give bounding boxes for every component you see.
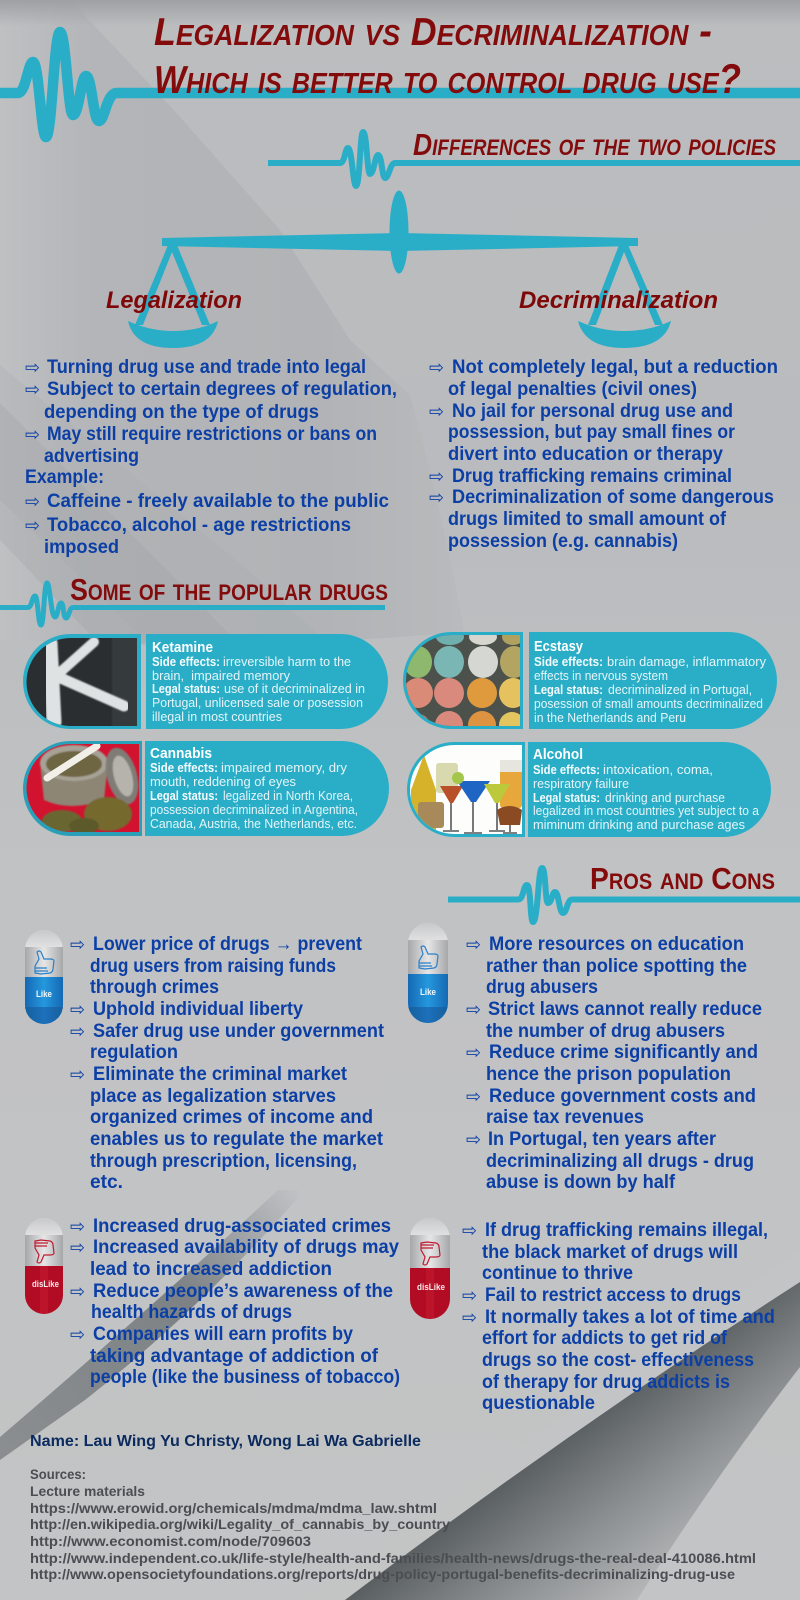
- text: ketamine card: Ketamine: [152, 640, 213, 656]
- text block: legalization cons: ⇨: [70, 1238, 85, 1258]
- text block: decriminalization pros: rather than police spotting the: [486, 956, 747, 977]
- text: alcohol card: legalized in most countries yet subject to a: [533, 804, 759, 818]
- text block: legalization cons: ⇨: [70, 1216, 85, 1238]
- text block: decriminalization pros: More resources on education: [489, 934, 744, 955]
- text block: decriminalization cons: Fail to restrict access to drugs: [485, 1285, 741, 1306]
- text block: decriminalization cons: ⇨: [462, 1220, 477, 1242]
- icon: dislike pill, decriminalization: [410, 1218, 450, 1319]
- text block: legalization points: Turning drug use and trade into legal: [47, 357, 366, 378]
- text block: legalization pros: [70, 934, 385, 1193]
- panel: ecstasy: [403, 632, 777, 729]
- text block: decriminalization points: ⇨: [429, 402, 444, 422]
- image: ecstasy pills: [403, 632, 523, 729]
- text block: decriminalization pros: ⇨: [466, 1086, 481, 1108]
- text block: legalization points: ⇨: [25, 516, 40, 536]
- text block: decriminalization pros: raise tax revenues: [486, 1107, 644, 1128]
- title: [154, 7, 741, 102]
- text block: decriminalization pros: In Portugal, ten years after: [488, 1129, 717, 1150]
- text block: legalization pros: through prescription, licensing,: [90, 1151, 357, 1172]
- text block: legalization points: Caffeine - freely available to the public: [47, 491, 389, 512]
- text block: decriminalization points: Not completely legal, but a reduction: [452, 357, 778, 378]
- image: ketamine powder: [20, 634, 141, 729]
- text: cannabis card: [145, 741, 389, 836]
- text: ketamine card: Side effects:: [152, 655, 220, 669]
- text block: legalization pros: Lower price of drugs → prevent: [93, 934, 363, 955]
- text block: decriminalization cons: ⇨: [462, 1286, 477, 1306]
- text block: decriminalization points: possession, but pay small fines or: [448, 422, 736, 443]
- text block: decriminalization points: ⇨: [429, 358, 444, 378]
- text block: legalization pros: through crimes: [90, 977, 219, 998]
- icon: dislike pill, decriminalization: disLike: [417, 1282, 445, 1293]
- text: alcohol card: respiratory failure: [533, 777, 629, 791]
- label: legalization: Legalization: [106, 287, 242, 314]
- text: ecstasy card: posession of small amounts decriminalized: [534, 697, 763, 711]
- text block: legalization pros: organized crimes of income and: [90, 1107, 373, 1128]
- sources: Lecture materials: [30, 1484, 145, 1499]
- text: ecstasy card: [529, 632, 777, 729]
- panel: ketamine: [20, 634, 388, 729]
- text: ketamine card: use of it decriminalized in: [224, 682, 365, 696]
- icon: like pill, decriminalization: Like: [420, 987, 436, 998]
- text block: legalization pros: Uphold individual liberty: [93, 999, 303, 1020]
- text: cannabis card: impaired memory, dry: [221, 761, 348, 775]
- text: ecstasy card: decriminalized in Portugal,: [608, 683, 752, 697]
- text: ecstasy card: brain damage, inflammatory: [607, 655, 767, 669]
- text block: decriminalization pros: ⇨: [466, 1130, 481, 1150]
- text: ecstasy card: Side effects:: [534, 655, 603, 669]
- text block: legalization points: imposed: [44, 537, 119, 558]
- heading: pros and cons: Pros and Cons: [590, 861, 775, 896]
- text block: decriminalization cons: questionable: [482, 1393, 595, 1414]
- image: cannabis grinder: [20, 741, 144, 836]
- text block: decriminalization points: ⇨: [429, 466, 444, 488]
- text block: legalization pros: enables us to regulate the market: [90, 1129, 384, 1150]
- text block: legalization pros: regulation: [90, 1042, 178, 1063]
- title: Legalization vs Decriminalization -: [154, 7, 712, 54]
- text block: decriminalization cons: of therapy for drug addicts is: [482, 1372, 730, 1393]
- text block: decriminalization cons: ⇨: [462, 1308, 477, 1328]
- text block: decriminalization pros: Reduce crime significantly and: [489, 1042, 758, 1063]
- text: ecstasy card: effects in nervous system: [534, 669, 668, 683]
- sources: http://www.opensocietyfoundations.org/reports/drug-policy-portugal-benefits-decriminalizing-drug-use: [30, 1567, 736, 1582]
- text: cannabis card: Legal status:: [150, 789, 218, 803]
- icon: like pill, decriminalization: [408, 923, 448, 1023]
- icon: dislike pill, legalization: [25, 1218, 63, 1314]
- text block: legalization pros: ⇨: [70, 1022, 85, 1042]
- text block: legalization pros: place as legalization starves: [90, 1086, 336, 1107]
- text block: legalization points: advertising: [44, 446, 139, 467]
- text block: decriminalization cons: continue to thrive: [482, 1263, 633, 1284]
- text: ecstasy card: in the Netherlands and Peru: [534, 711, 686, 725]
- text block: legalization pros: etc.: [90, 1172, 123, 1193]
- text: cannabis card: Cannabis: [150, 746, 212, 762]
- text block: decriminalization pros: drug abusers: [486, 977, 598, 998]
- text block: legalization points: ⇨: [25, 492, 40, 512]
- text block: decriminalization points: drugs limited to small amount of: [448, 509, 727, 530]
- text block: legalization pros: ⇨: [70, 1000, 85, 1020]
- text block: decriminalization cons: If drug trafficking remains illegal,: [485, 1220, 768, 1241]
- text: alcohol card: intoxication, coma,: [603, 763, 713, 777]
- text block: legalization points: ⇨: [25, 358, 40, 378]
- text block: legalization points: ⇨: [25, 424, 40, 446]
- text block: decriminalization pros: decriminalizing all drugs - drug: [486, 1151, 754, 1172]
- text block: legalization cons: ⇨: [70, 1324, 85, 1346]
- image: alcohol glasses: [405, 742, 525, 837]
- label: decriminalization: Decriminalization: [519, 287, 718, 314]
- text block: decriminalization points: No jail for personal drug use and: [452, 401, 733, 422]
- text block: decriminalization points: ⇨: [429, 488, 444, 508]
- text block: legalization cons: Reduce people’s awareness of the: [93, 1281, 393, 1302]
- text: ketamine card: [146, 634, 388, 729]
- text block: decriminalization pros: Strict laws cannot really reduce: [488, 999, 762, 1020]
- text block: legalization cons: lead to increased addiction: [90, 1259, 332, 1280]
- sources: Sources:: [30, 1467, 86, 1482]
- text block: decriminalization pros: [466, 934, 762, 1193]
- text block: legalization points: [25, 357, 397, 558]
- section ECG line: popular drugs: [0, 583, 385, 625]
- text: ketamine card: Portugal, unlicensed sale or posession: [152, 696, 363, 710]
- text block: decriminalization pros: hence the prison population: [486, 1064, 731, 1085]
- text: alcohol card: Alcohol: [533, 747, 583, 763]
- text block: legalization points: Example:: [25, 467, 104, 488]
- text block: legalization pros: Eliminate the criminal market: [93, 1064, 348, 1085]
- text block: legalization cons: Companies will earn profits by: [93, 1324, 353, 1345]
- text block: decriminalization points: [429, 357, 778, 552]
- text: ketamine card: irreversible harm to the: [223, 655, 351, 669]
- text block: decriminalization pros: the number of drug abusers: [486, 1021, 725, 1042]
- text block: legalization pros: Safer drug use under government: [93, 1021, 385, 1042]
- panel: alcohol: [405, 742, 771, 837]
- text block: decriminalization cons: drugs so the cost- effectiveness: [482, 1350, 754, 1371]
- text block: decriminalization points: Decriminalization of some dangerous: [452, 487, 774, 508]
- icon: like pill, legalization: [25, 930, 63, 1024]
- text block: legalization points: Subject to certain degrees of regulation,: [47, 379, 397, 400]
- text block: legalization points: ⇨: [25, 380, 40, 400]
- text: ecstasy card: Legal status:: [534, 683, 603, 697]
- text block: legalization cons: ⇨: [70, 1282, 85, 1302]
- panel: cannabis: [20, 741, 389, 836]
- text block: legalization pros: drug users from raising funds: [90, 956, 336, 977]
- text: cannabis card: mouth, reddening of eyes: [150, 775, 296, 789]
- section ECG line: pros and cons: [448, 868, 800, 922]
- text: alcohol card: Legal status:: [533, 791, 600, 805]
- text: ketamine card: brain, impaired memory: [152, 669, 291, 683]
- author names: Name: Lau Wing Yu Christy, Wong Lai Wa Gabrielle: [30, 1433, 421, 1450]
- text: ketamine card: illegal in most countries: [152, 710, 282, 724]
- section ECG line: differences: [268, 132, 800, 186]
- text block: decriminalization cons: It normally takes a lot of time and: [485, 1307, 775, 1328]
- text: ketamine card: Legal status:: [152, 682, 220, 696]
- icon: dislike pill, legalization: disLike: [32, 1279, 59, 1290]
- text block: decriminalization pros: Reduce government costs and: [489, 1086, 756, 1107]
- icon: like pill, legalization: Like: [36, 989, 52, 1000]
- sources: [30, 1467, 756, 1582]
- text block: legalization points: depending on the type of drugs: [44, 402, 319, 423]
- text block: decriminalization points: divert into education or therapy: [448, 444, 723, 465]
- text: ecstasy card: Ecstasy: [534, 639, 583, 655]
- text: cannabis card: Canada, Austria, the Netherlands, etc.: [150, 817, 357, 831]
- heading: some of the popular drugs: Some of the popular drugs: [70, 572, 388, 607]
- text block: legalization cons: Increased availability of drugs may: [93, 1237, 399, 1258]
- text block: legalization points: Tobacco, alcohol - age restrictions: [47, 515, 351, 536]
- header ECG line: [0, 32, 800, 137]
- sources: https://www.erowid.org/chemicals/mdma/mdma_law.shtml: [30, 1501, 437, 1516]
- text: alcohol card: [528, 742, 771, 837]
- text block: decriminalization cons: the black market of drugs will: [482, 1242, 738, 1263]
- text block: legalization points: May still require restrictions or bans on: [47, 424, 377, 445]
- text block: decriminalization pros: ⇨: [466, 934, 481, 956]
- text block: legalization cons: [70, 1216, 400, 1388]
- text block: decriminalization points: Drug trafficking remains criminal: [452, 466, 732, 487]
- sources: http://www.economist.com/node/709603: [30, 1534, 312, 1549]
- text block: decriminalization pros: ⇨: [466, 1042, 481, 1064]
- text: alcohol card: Side effects:: [533, 763, 600, 777]
- text block: decriminalization points: of legal penalties (civil ones): [448, 379, 697, 400]
- text block: legalization cons: Increased drug-associated crimes: [93, 1216, 391, 1237]
- text: cannabis card: legalized in North Korea,: [223, 789, 353, 803]
- text: cannabis card: Side effects:: [150, 761, 218, 775]
- text block: decriminalization cons: effort for addicts to get rid of: [482, 1328, 728, 1349]
- text block: legalization pros: ⇨: [70, 934, 85, 956]
- icon: balance scale: [128, 190, 671, 348]
- text block: legalization cons: taking advantage of addiction of: [90, 1346, 379, 1367]
- text: alcohol card: miminum drinking and purchase ages: [533, 818, 745, 832]
- sources: http://en.wikipedia.org/wiki/Legality_of_cannabis_by_country: [30, 1517, 451, 1532]
- text: cannabis card: possession decriminalized in Argentina,: [150, 803, 358, 817]
- text block: legalization pros: ⇨: [70, 1064, 85, 1086]
- text block: legalization cons: people (like the business of tobacco): [90, 1367, 400, 1388]
- text block: decriminalization pros: ⇨: [466, 1000, 481, 1020]
- sources: http://www.independent.co.uk/life-style/health-and-families/health-news/drugs-the-real-deal-410086.html: [30, 1551, 756, 1566]
- text block: decriminalization pros: abuse is down by half: [486, 1172, 676, 1193]
- text block: legalization cons: health hazards of drugs: [91, 1302, 292, 1323]
- text block: decriminalization cons: [462, 1220, 775, 1414]
- text block: decriminalization points: possession (e.g. cannabis): [448, 531, 678, 552]
- text: alcohol card: drinking and purchase: [605, 791, 725, 805]
